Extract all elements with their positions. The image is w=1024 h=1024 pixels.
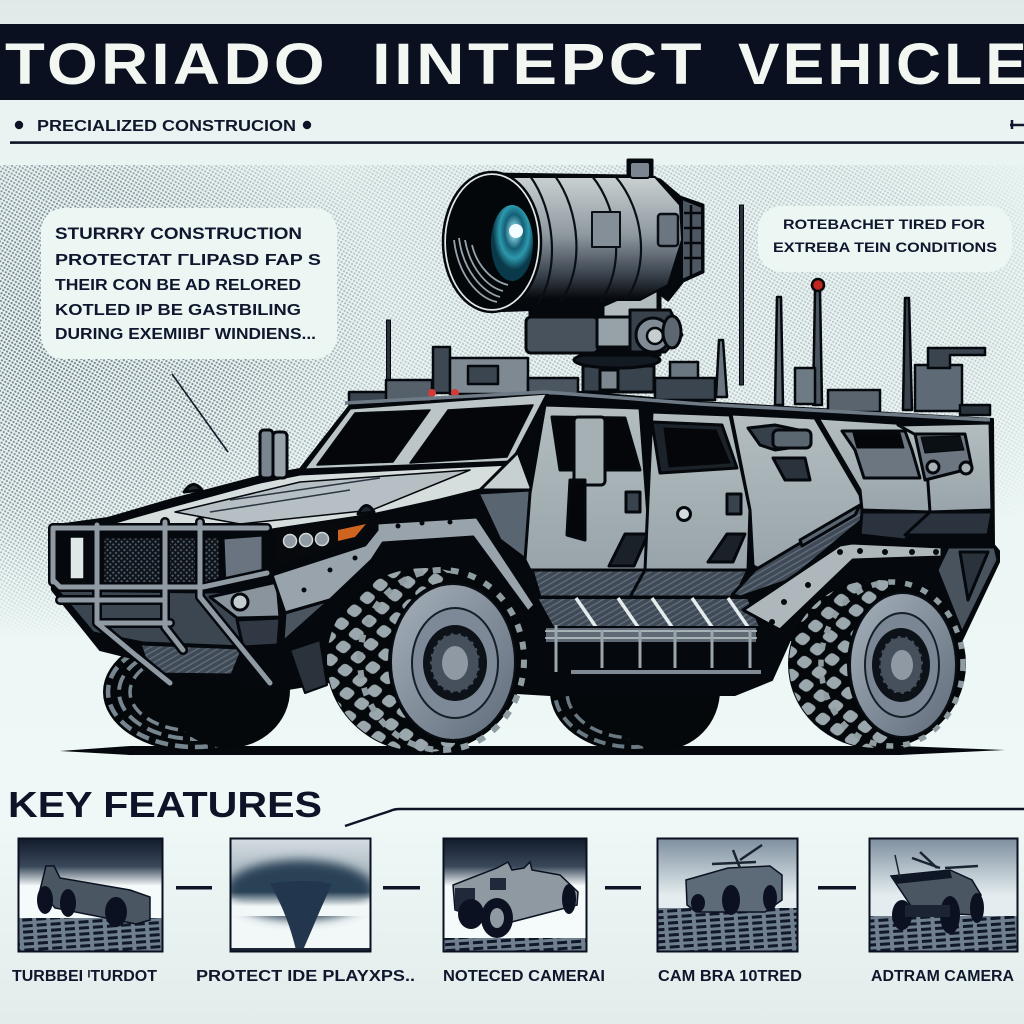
hull upper band and windshield — [303, 392, 990, 470]
callout: left text bubble: DURING EXEMIIBΓ WINDIENS... — [55, 326, 316, 343]
side hull door panels — [525, 405, 992, 597]
callout: left text bubble: THEIR CON BE AD RELORED — [55, 277, 301, 294]
callout: right text bubble — [758, 206, 1012, 272]
near front wheel — [325, 565, 524, 755]
rear fender plate and guard — [743, 543, 998, 633]
connector — [818, 886, 856, 890]
heading: key features — [8, 784, 1024, 826]
connector — [605, 886, 641, 890]
title banner: VEHICLE — [738, 32, 1024, 97]
callout: left text bubble — [41, 208, 337, 359]
brush guard tubes — [53, 522, 270, 683]
feature 1: turbulent thumbnail — [18, 838, 163, 952]
callout: left text bubble: PROTECTAT ΓLIPASD FAP S — [55, 252, 321, 269]
connector — [383, 886, 420, 890]
subtitle strip — [10, 118, 1024, 144]
far middle wheel — [550, 630, 720, 752]
front fascia, lights and grille — [57, 490, 537, 675]
title banner — [0, 24, 1024, 100]
feature 2: tornado thumbnail — [226, 838, 374, 952]
vehicle dark silhouette — [50, 389, 999, 695]
callout pointer line — [172, 374, 228, 452]
camera lens barrel — [443, 160, 703, 312]
near rear wheel — [788, 578, 966, 750]
callout: right text bubble: ROTEBACHET TIRED FOR — [783, 217, 985, 232]
title banner: IINTEPCT — [372, 32, 705, 97]
feature labels: NOTECED CAMERAI — [443, 968, 605, 985]
feature labels: CAM BRA 10TRED — [658, 968, 802, 985]
halftone backdrop — [0, 165, 1024, 628]
feature 5: rear vehicle thumbnail — [869, 838, 1018, 952]
feature labels — [12, 968, 1014, 985]
callout: left text bubble: STURRRY CONSTRUCTION — [55, 225, 302, 243]
mast and pedestal — [526, 285, 682, 392]
callout: right text bubble: EXTREBA TEIN CONDITIONS — [773, 240, 997, 255]
heading: key features: KEY FEATURES — [8, 784, 322, 825]
lower skirt and step rail — [537, 598, 762, 675]
feature 4: camera vehicle thumbnail — [657, 838, 798, 952]
feature 3: airborne truck thumbnail — [443, 838, 587, 952]
feature labels: TURBBEI ᴵTURDOT — [12, 968, 158, 985]
subtitle strip: PRECIALIZED CONSTRUCION — [37, 118, 296, 135]
far front wheel — [103, 632, 290, 752]
feature labels: PROTECT IDE PLAYXPS.. — [196, 968, 415, 985]
feature labels: ADTRAM CAMERA — [871, 968, 1014, 985]
armored tornado vehicle illustration — [50, 160, 1005, 755]
callout: left text bubble: KOTLED IP BE GASTBILING — [55, 302, 301, 319]
mud flap — [290, 640, 327, 693]
ground shadow — [60, 746, 1005, 755]
connector — [176, 886, 212, 890]
hood — [108, 430, 532, 530]
title banner: TORIADO — [5, 32, 328, 97]
roof equipment — [349, 205, 990, 415]
